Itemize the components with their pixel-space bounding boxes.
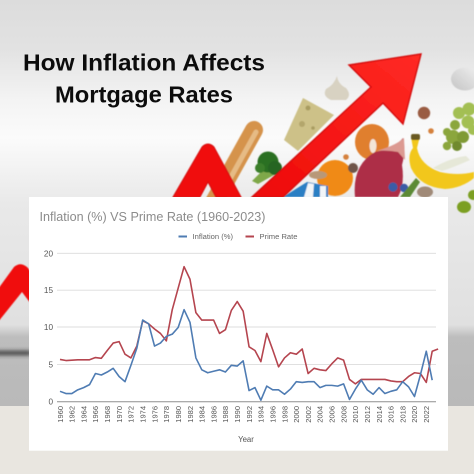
- icon: green stalk: [400, 178, 420, 197]
- title: Mortgage Rates: [55, 82, 233, 108]
- icon: meat: [355, 138, 404, 197]
- x axis labels: 2012: [363, 406, 372, 423]
- x axis line: [57, 401, 436, 403]
- x axis labels: 1974: [138, 406, 148, 423]
- x axis labels: 1980: [174, 406, 183, 423]
- arrow: rising red zigzag: [0, 54, 421, 322]
- panel: chart: [29, 197, 448, 451]
- x axis labels: 1968: [103, 406, 112, 423]
- background floor: [0, 406, 474, 474]
- icon: sliced fruit: [355, 124, 389, 160]
- x axis labels: 1994: [257, 406, 266, 423]
- x axis labels: 1970: [115, 406, 124, 423]
- shadow band: [0, 351, 31, 355]
- x axis labels: 2002: [304, 406, 313, 423]
- legend: Inflation (%): [192, 232, 233, 241]
- x axis labels: 2004: [316, 406, 325, 423]
- y axis labels: 15: [44, 286, 53, 295]
- legend: [178, 232, 297, 241]
- icon: scallion: [433, 156, 470, 171]
- x axis labels: 2008: [339, 406, 348, 423]
- icon: broccoli: [252, 152, 282, 184]
- x axis labels: 2014: [375, 406, 384, 423]
- line: inflation: [60, 310, 432, 400]
- icon: meat fat: [376, 138, 405, 160]
- x axis labels: 1990: [233, 406, 242, 423]
- x axis labels: 1962: [68, 406, 77, 423]
- axis title: Year: [238, 435, 254, 444]
- y axis labels: [44, 249, 53, 407]
- icon: green olives: [457, 190, 474, 213]
- food illustration: [214, 68, 474, 213]
- icon: garlic: [325, 76, 349, 100]
- title: [23, 50, 265, 108]
- icon: blueberries: [388, 182, 408, 192]
- icon: banana: [409, 134, 474, 189]
- x axis labels: 1992: [245, 406, 254, 423]
- y axis labels: 20: [44, 249, 53, 258]
- icon: small seeds: [343, 128, 434, 160]
- x axis labels: 2018: [398, 406, 407, 423]
- icon: egg: [451, 68, 474, 90]
- icon: mushroom: [309, 171, 327, 179]
- x axis labels: 2000: [292, 406, 301, 423]
- x axis labels: 1972: [127, 406, 136, 423]
- gridlines: [57, 253, 436, 364]
- icon: baguette: [214, 130, 256, 202]
- icon: mushroom small: [417, 186, 433, 198]
- x axis labels: 2006: [328, 406, 336, 423]
- arrow: left piece: [0, 264, 31, 322]
- icon: nut: [418, 107, 430, 119]
- x axis labels: 1978: [162, 406, 171, 423]
- x axis labels: 2022: [422, 406, 431, 423]
- x axis labels: 2016: [387, 406, 396, 423]
- x axis labels: 1988: [221, 406, 230, 423]
- chart title: Inflation (%) VS Prime Rate (1960-2023): [40, 209, 266, 224]
- icon: grapes: [443, 102, 474, 151]
- x axis labels: 1966: [91, 406, 100, 423]
- y axis labels: 0: [48, 398, 53, 407]
- x axis labels: 1964: [79, 406, 88, 423]
- x axis labels: 1976: [150, 406, 159, 423]
- icon: orange: [317, 160, 353, 196]
- x axis labels: 1982: [186, 406, 195, 423]
- y axis labels: 10: [44, 323, 53, 332]
- icon: cheese: [284, 98, 334, 151]
- x axis labels: 1998: [280, 406, 289, 423]
- y axis labels: 5: [48, 360, 53, 369]
- icon: milk carton: [283, 182, 328, 197]
- x axis labels: 1986: [209, 406, 218, 423]
- x axis labels: 1996: [268, 406, 278, 423]
- x axis labels: 2010: [351, 406, 360, 423]
- icon: dark mushroom: [348, 163, 358, 173]
- legend: Prime Rate: [260, 232, 297, 241]
- title: How Inflation Affects: [23, 50, 265, 76]
- x axis labels: 2020: [410, 406, 419, 423]
- x axis labels: 1960: [56, 406, 65, 423]
- line: prime rate: [60, 267, 438, 384]
- x axis labels: [56, 406, 431, 423]
- x axis labels: 1984: [198, 406, 207, 423]
